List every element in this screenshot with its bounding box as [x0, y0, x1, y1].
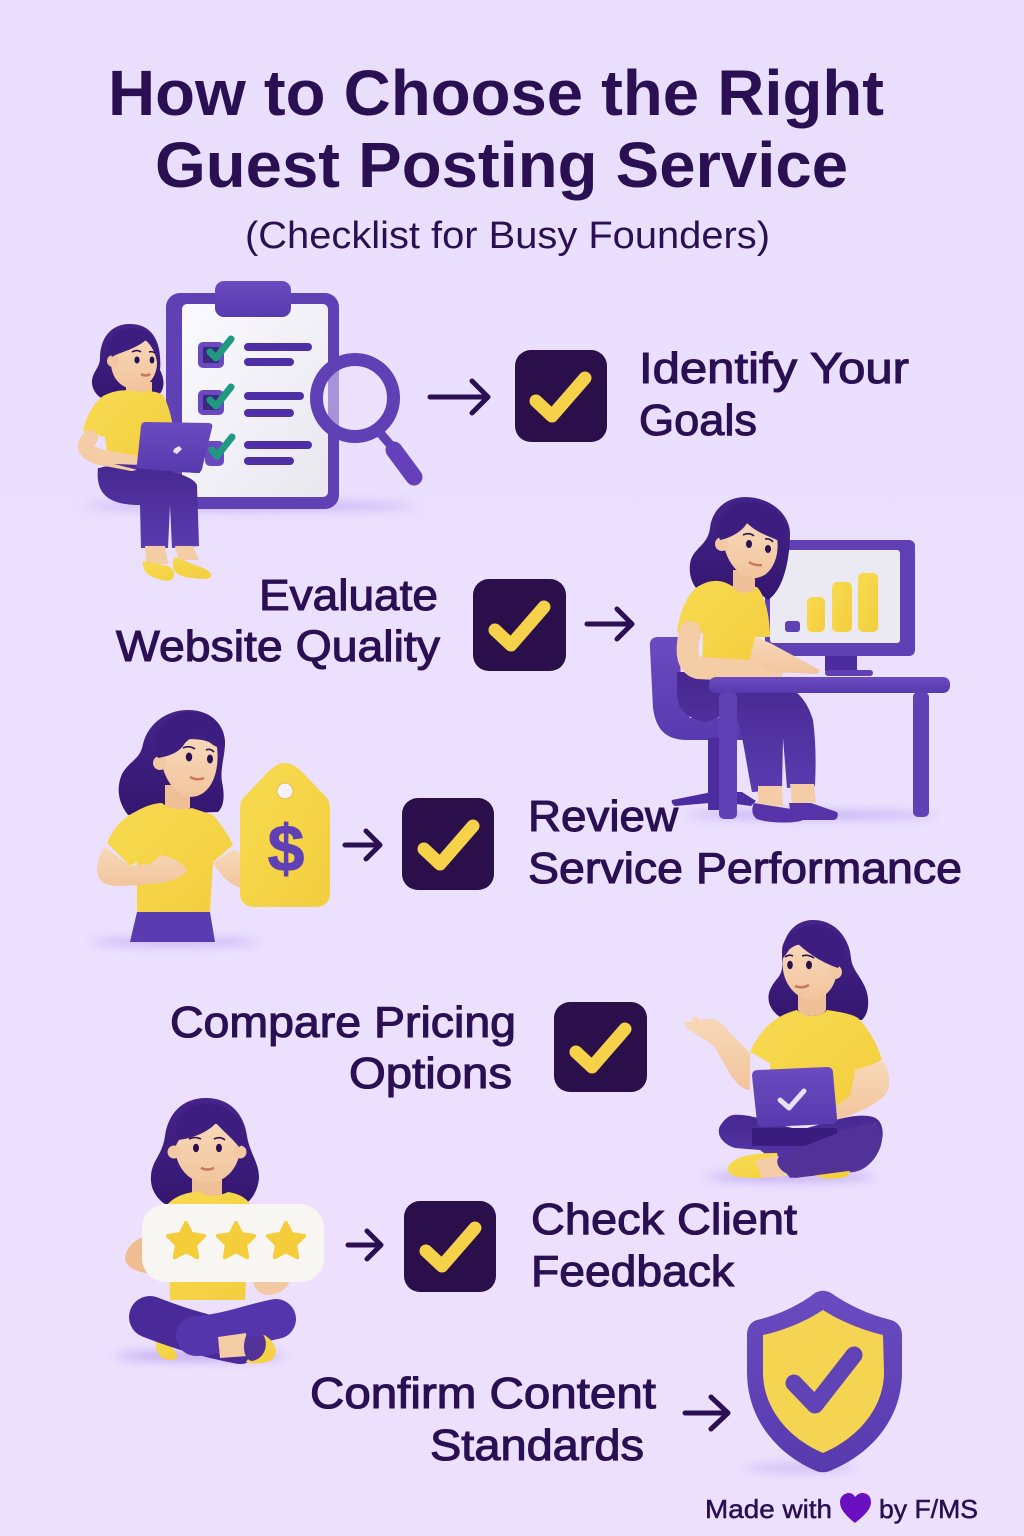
illustration: woman with laptop gesturing	[684, 920, 889, 1181]
credit: made with love by F/MS	[705, 1493, 978, 1524]
check box 5	[404, 1201, 496, 1292]
label: compare pricing options: Options	[349, 1049, 512, 1098]
label: confirm content standards: Standards	[430, 1421, 644, 1470]
check box 1	[515, 350, 607, 442]
label: confirm content standards	[310, 1369, 656, 1470]
arrow 2	[587, 609, 632, 639]
check box 3	[402, 798, 494, 890]
label: compare pricing options	[170, 998, 516, 1098]
illustration: woman at desk with chart monitor	[650, 497, 950, 823]
subtitle: (Checklist for Busy Founders)	[245, 215, 770, 257]
check box 2	[473, 579, 566, 671]
price tag: $	[268, 811, 304, 885]
legs	[150, 1317, 276, 1363]
credit: made with love by F/MS: by F/MS	[879, 1494, 978, 1524]
label: confirm content standards: Confirm Content	[310, 1369, 656, 1418]
credit: made with love by F/MS: Made with	[705, 1494, 832, 1524]
check box 4	[554, 1002, 647, 1092]
laptop	[752, 1067, 837, 1127]
price tag	[240, 763, 330, 907]
waving arm	[684, 1016, 750, 1090]
rating card	[142, 1204, 324, 1282]
illustration: woman holding star rating card	[115, 1098, 324, 1363]
title: Guest Posting Service	[155, 129, 848, 201]
title: How to Choose the Right	[108, 57, 884, 129]
label: identify your goals: Goals	[639, 396, 757, 445]
arrow 3	[345, 831, 380, 859]
label: identify your goals: Identify Your	[639, 344, 909, 393]
label: review service performance: Review	[528, 792, 678, 841]
desk	[709, 677, 950, 819]
label: compare pricing options: Compare Pricing	[170, 998, 516, 1047]
arrow 5	[685, 1397, 728, 1429]
label: check client feedback: Feedback	[531, 1247, 735, 1296]
illustration: woman with clipboard and magnifier	[83, 281, 415, 581]
illustration: woman with price tag	[90, 710, 330, 945]
arrow 4	[348, 1231, 381, 1259]
title	[108, 57, 884, 201]
chair	[650, 637, 756, 810]
label: review service performance	[528, 792, 962, 893]
label: evaluate website quality: Website Quality	[116, 622, 440, 671]
person	[83, 324, 212, 581]
icon: heart	[840, 1493, 871, 1523]
label: evaluate website quality	[116, 571, 440, 671]
label: review service performance: Service Performance	[528, 844, 962, 893]
label: check client feedback	[531, 1195, 797, 1296]
person	[677, 497, 838, 823]
label: check client feedback: Check Client	[531, 1195, 797, 1244]
label: identify your goals	[639, 344, 909, 445]
label: evaluate website quality: Evaluate	[259, 571, 438, 620]
arrow 1	[430, 381, 488, 413]
icon: shield with check	[745, 1291, 902, 1472]
legs	[719, 1115, 883, 1179]
